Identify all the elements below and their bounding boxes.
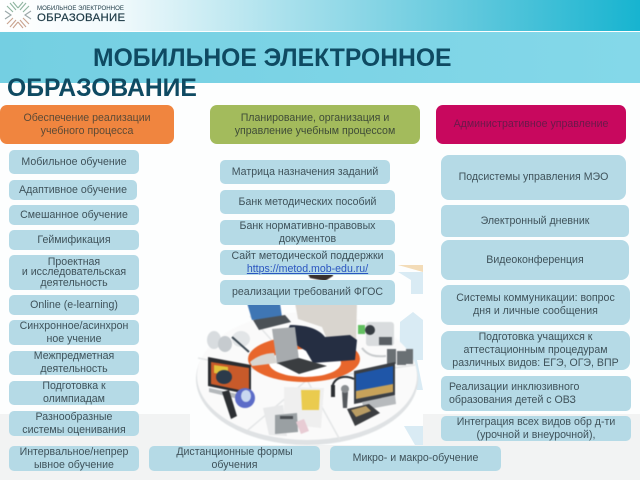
- item: [9, 180, 137, 200]
- person: [250, 303, 357, 366]
- heading: planning: [210, 105, 420, 144]
- item: Банк методических пособий: [239, 196, 376, 208]
- item: системы оценивания: [22, 424, 126, 436]
- item: и исследовательская: [22, 266, 126, 278]
- pen and note: [296, 419, 309, 434]
- film strips: [387, 349, 413, 365]
- item: ное учение: [47, 332, 101, 344]
- heading: learning process: [0, 105, 174, 144]
- item: Подготовка к: [42, 380, 106, 392]
- item: [220, 160, 390, 184]
- documents and notes: [263, 387, 324, 436]
- panel: administrative management: [436, 105, 631, 441]
- item: дня и личные сообщения: [473, 305, 598, 317]
- item: [220, 280, 395, 305]
- item: [9, 230, 139, 250]
- bottom box: micro and macro learning: [330, 446, 501, 471]
- item: [9, 446, 139, 471]
- item: аттестационным процедурам: [463, 344, 608, 356]
- item: Банк нормативно-правовых: [240, 220, 375, 232]
- item: Матрица назначения заданий: [232, 166, 378, 178]
- item: Интеграция всех видов обр д-ти: [457, 416, 615, 428]
- heading: learning process: учебного процесса: [41, 124, 133, 136]
- camcorder: [358, 322, 394, 356]
- headset and microphone: [331, 377, 354, 408]
- item: Подсистемы управления МЭО: [459, 171, 608, 183]
- item: Синхронное/асинхрон: [20, 320, 128, 332]
- central illustration: learner and devices on disc: [196, 275, 418, 445]
- tablet: [347, 404, 380, 426]
- heading: administrative: [436, 105, 626, 144]
- item: Межпредметная: [34, 350, 114, 362]
- disc: [196, 312, 418, 445]
- title line 1: МОБИЛЬНОЕ ЭЛЕКТРОННОЕ: [93, 45, 452, 72]
- item: Смешанное обучение: [20, 208, 128, 220]
- heading: planning: Планирование, организация и: [241, 112, 389, 124]
- item: [441, 376, 631, 411]
- item: Разнообразные: [36, 410, 112, 422]
- title line 2: ОБРАЗОВАНИЕ: [7, 75, 197, 102]
- left tv: [208, 357, 251, 401]
- logo text: ОБРАЗОВАНИЕ: [37, 12, 125, 24]
- item: [9, 381, 139, 405]
- item: Реализации инклюзивного: [449, 380, 579, 392]
- item: [9, 255, 139, 290]
- item: [441, 416, 631, 441]
- item with link: [220, 250, 395, 275]
- item: [9, 205, 139, 225]
- cameras left: [207, 331, 250, 352]
- heading: administrative: Административное управление: [454, 118, 608, 130]
- item: [441, 155, 626, 200]
- item: Подготовка учащихся к: [479, 331, 592, 343]
- item: деятельность: [40, 363, 108, 375]
- item: [220, 220, 395, 245]
- item: образования детей с ОВЗ: [449, 394, 576, 406]
- item: [9, 411, 139, 436]
- item: олимпиадам: [43, 393, 105, 405]
- item: Системы коммуникации: вопрос: [456, 292, 615, 304]
- item: различных видов: ЕГЭ, ОГЭ, ВПР: [452, 357, 619, 369]
- bottom box: distance learning: обучения: [212, 458, 257, 470]
- item: Интервальное/непрер: [20, 446, 128, 458]
- item: Адаптивное обучение: [19, 184, 127, 196]
- header bar: [0, 0, 640, 31]
- item: (урочной и внеурочной),: [477, 428, 595, 440]
- item: [9, 320, 139, 345]
- heading: learning process: Обеспечение реализации: [23, 112, 151, 124]
- item: Видеоконференция: [486, 254, 584, 266]
- item: [441, 240, 629, 280]
- title band: [0, 32, 640, 83]
- background decoration: [0, 265, 640, 480]
- item: [9, 295, 139, 315]
- right tv: [354, 362, 396, 410]
- item: документов: [279, 232, 336, 244]
- item: [441, 285, 630, 325]
- panel: learning process: [0, 105, 174, 471]
- item: деятельность: [40, 277, 108, 289]
- item: [9, 351, 139, 375]
- item: Мобильное обучение: [21, 156, 127, 168]
- logo text: [37, 5, 125, 24]
- panel: planning and management: [210, 105, 420, 305]
- item with link: https://metod.mob-edu.ru/: [247, 262, 368, 274]
- item with link: Сайт методической поддержки: [231, 250, 384, 262]
- remote and globe: [222, 388, 255, 419]
- top figure hair: [306, 270, 333, 281]
- item: [441, 331, 630, 370]
- laptop behind: [247, 303, 291, 330]
- orange ring: [248, 336, 360, 382]
- item: [441, 205, 629, 237]
- item: ывное обучение: [34, 458, 114, 470]
- item: [9, 150, 139, 174]
- bottom box: distance learning: [149, 446, 320, 471]
- laptop: [272, 327, 327, 374]
- bottom box: distance learning: Дистанционные формы: [176, 446, 293, 458]
- item: Online (e-learning): [30, 298, 118, 310]
- calculator: [275, 413, 298, 434]
- bottom box: micro and macro learning: Микро- и макро-обучение: [353, 452, 478, 464]
- heading: planning: управление учебным процессом: [235, 124, 395, 136]
- item: Проектная: [48, 256, 100, 268]
- item: [220, 190, 395, 214]
- logo text: МОБИЛЬНОЕ ЭЛЕКТРОННОЕ: [37, 5, 124, 12]
- item: Геймификация: [37, 234, 111, 246]
- logo icon: [4, 2, 32, 28]
- item: Электронный дневник: [481, 214, 589, 226]
- item: реализации требований ФГОС: [232, 286, 383, 298]
